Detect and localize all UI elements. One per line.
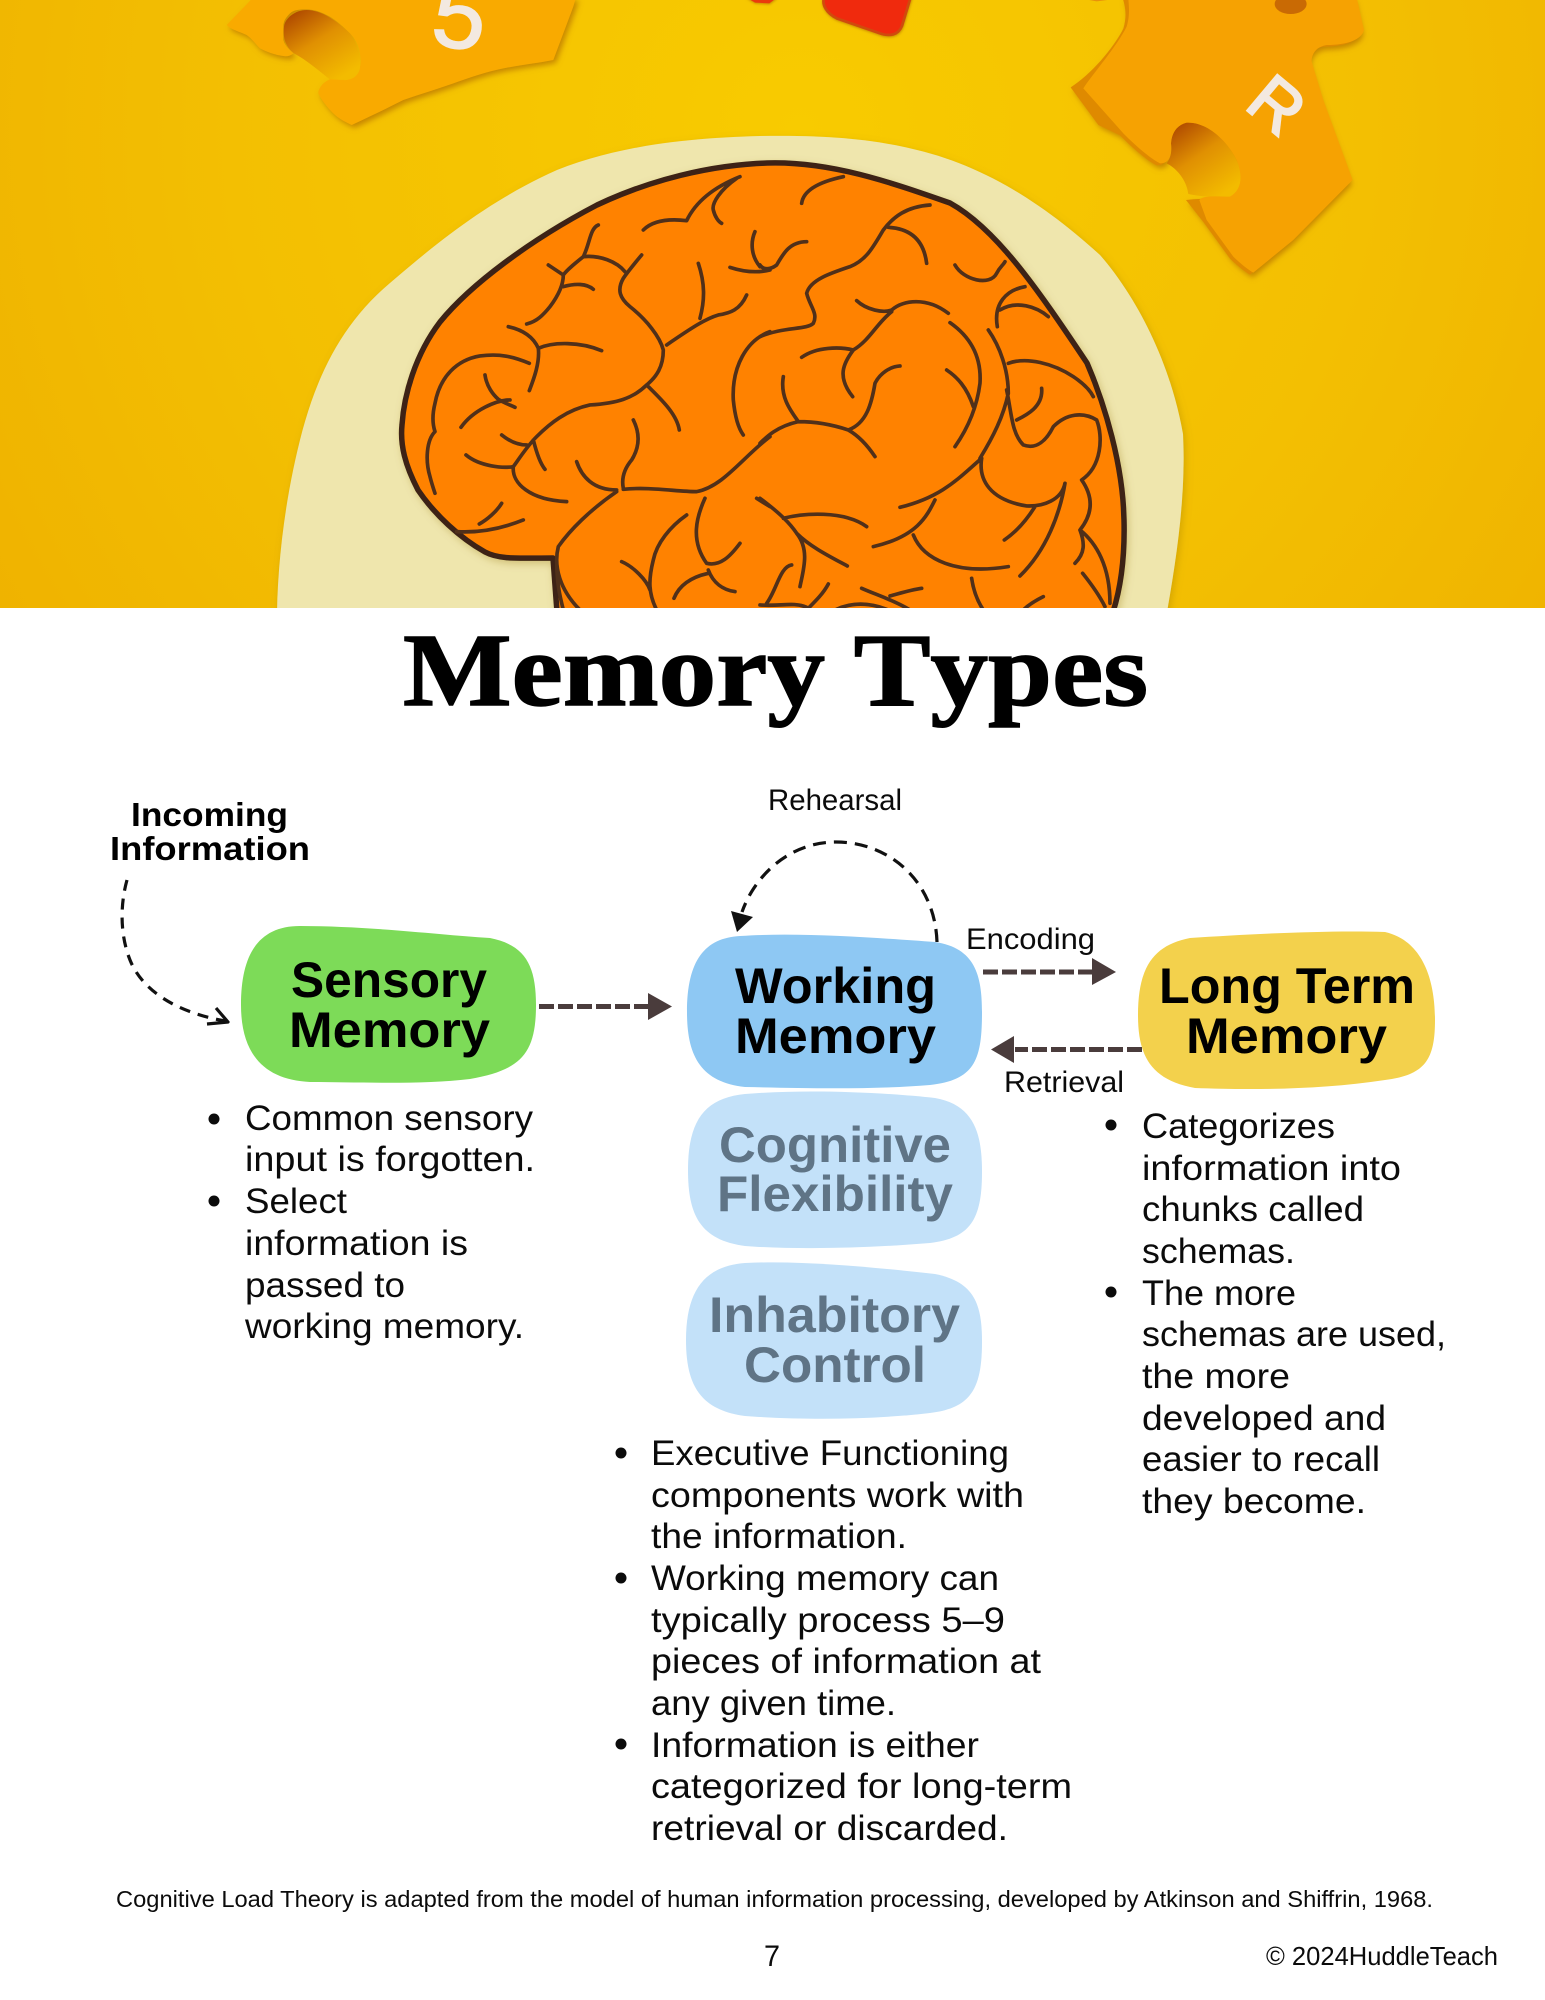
text block: working memory bullets: Information is either bbox=[651, 1726, 979, 1765]
panel: inhabitory control: Inhabitory bbox=[709, 1287, 960, 1343]
arrow: sensory to working bbox=[539, 993, 672, 1020]
panel: long term memory: Long Term bbox=[1159, 958, 1415, 1014]
panel: cognitive flexibility bbox=[688, 1091, 982, 1248]
text block: long term memory bullets: schemas are used, bbox=[1142, 1315, 1446, 1354]
text block: working memory bullets bbox=[616, 1434, 1072, 1848]
puzzle letter R: R bbox=[1233, 60, 1320, 150]
page number: 7 bbox=[764, 1940, 780, 1973]
brain illustration bbox=[402, 163, 1124, 612]
text block: sensory memory bullets: Common sensory bbox=[245, 1099, 534, 1138]
arrow: rehearsal loop bbox=[731, 842, 937, 942]
text block: long term memory bullets: easier to recall bbox=[1142, 1440, 1380, 1479]
text block: long term memory bullets bbox=[1106, 1107, 1446, 1521]
footnote: Cognitive Load Theory is adapted from the model of human information processing, developed by Atkinson and Shiffrin, 1968. bbox=[116, 1886, 1433, 1912]
copyright: © 2024HuddleTeach bbox=[1266, 1941, 1498, 1971]
panel: sensory memory bbox=[241, 926, 536, 1083]
title: Memory Types bbox=[403, 613, 1148, 728]
panel: working memory: Memory bbox=[735, 1008, 936, 1064]
text block: long term memory bullets: they become. bbox=[1142, 1482, 1366, 1521]
text block: long term memory bullets: the more bbox=[1142, 1357, 1290, 1396]
label: retrieval: Retrieval bbox=[1004, 1066, 1124, 1099]
arrow: incoming to sensory bbox=[122, 880, 228, 1024]
text block: working memory bullets: any given time. bbox=[651, 1684, 896, 1723]
text block: long term memory bullets: The more bbox=[1142, 1274, 1296, 1313]
panel: cognitive flexibility: Flexibility bbox=[717, 1166, 953, 1222]
panel: long term memory bbox=[1138, 931, 1435, 1089]
panel: working memory bbox=[687, 935, 982, 1088]
arrow: retrieval bbox=[991, 1036, 1142, 1063]
text block: sensory memory bullets: passed to bbox=[245, 1266, 405, 1305]
icon: right puzzle piece bbox=[1071, 0, 1364, 275]
label: encoding: Encoding bbox=[966, 923, 1095, 956]
panel: sensory memory: Memory bbox=[289, 1002, 490, 1058]
icon: red puzzle piece bbox=[746, 0, 911, 35]
panel: inhabitory control bbox=[686, 1262, 982, 1419]
text block: sensory memory bullets: input is forgotten. bbox=[245, 1140, 535, 1179]
hero photo: brain and puzzle pieces bbox=[0, 0, 1545, 612]
text block: working memory bullets: retrieval or discarded. bbox=[651, 1809, 1008, 1848]
panel: cognitive flexibility: Cognitive bbox=[719, 1117, 951, 1173]
text block: long term memory bullets: Categorizes bbox=[1142, 1107, 1335, 1146]
heading: incoming information bbox=[110, 796, 310, 867]
brain folds, right half bbox=[760, 177, 1110, 610]
text block: sensory memory bullets: working memory. bbox=[244, 1307, 524, 1346]
text block: working memory bullets: the information. bbox=[651, 1517, 907, 1556]
label: rehearsal: Rehearsal bbox=[768, 784, 902, 817]
panel: inhabitory control: Control bbox=[744, 1337, 926, 1393]
text block: sensory memory bullets bbox=[208, 1099, 535, 1346]
text block: working memory bullets: Working memory can bbox=[651, 1559, 999, 1598]
text block: working memory bullets: Executive Functioning bbox=[651, 1434, 1009, 1473]
text block: long term memory bullets: schemas. bbox=[1142, 1232, 1295, 1271]
text block: working memory bullets: categorized for long-term bbox=[651, 1767, 1072, 1806]
text block: long term memory bullets: information into bbox=[1142, 1149, 1401, 1188]
heading: incoming information: Incoming bbox=[131, 796, 288, 833]
panel: long term memory: Memory bbox=[1186, 1008, 1387, 1064]
icon: left puzzle piece bbox=[227, 0, 576, 125]
brain folds, left half bbox=[427, 177, 770, 610]
cream head silhouette bbox=[277, 136, 1184, 612]
text block: sensory memory bullets: Select bbox=[245, 1182, 347, 1221]
text block: long term memory bullets: chunks called bbox=[1142, 1190, 1364, 1229]
text block: sensory memory bullets: information is bbox=[245, 1224, 468, 1263]
text block: long term memory bullets: developed and bbox=[1142, 1399, 1386, 1438]
text block: working memory bullets: components work with bbox=[651, 1476, 1024, 1515]
heading: incoming information: Information bbox=[110, 830, 310, 867]
brain outline bbox=[402, 163, 1124, 612]
panel: sensory memory: Sensory bbox=[291, 952, 487, 1008]
arrow: encoding bbox=[983, 958, 1116, 985]
text block: working memory bullets: pieces of information at bbox=[651, 1642, 1041, 1681]
text block: working memory bullets: typically process 5–9 bbox=[651, 1601, 1005, 1640]
panel: working memory: Working bbox=[735, 958, 936, 1014]
